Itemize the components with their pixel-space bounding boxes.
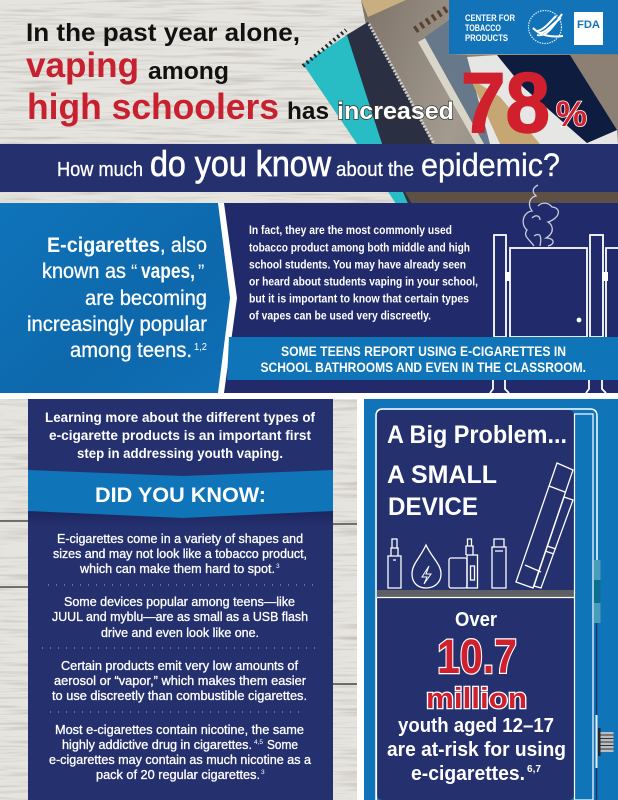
text block: most commonly used: but it is important to know that certain types bbox=[249, 294, 469, 306]
fact: popular devices: JUUL and myblu—are as small as a USB flash bbox=[52, 610, 308, 624]
fact: nicotine: 4,5 bbox=[254, 739, 263, 746]
panel: e-cigarettes intro: increasingly popular bbox=[27, 313, 207, 336]
callout: some teens report: SOME TEENS REPORT USING E-CIGARETTES IN bbox=[281, 344, 566, 359]
banner: how much do you know: do you know bbox=[150, 143, 332, 184]
fact: shapes and sizes: E-cigarettes come in a variety of shapes and bbox=[57, 532, 303, 546]
title: has bbox=[287, 98, 329, 125]
banner: how much do you know: How much bbox=[57, 159, 143, 181]
title: 78 bbox=[461, 56, 550, 151]
logo: Center for Tobacco Products and FDA: PRODUCTS bbox=[465, 33, 508, 44]
stat: 10.7 million youth: youth aged 12–17 bbox=[398, 714, 554, 737]
ribbon heading: did you know: DID YOU KNOW: bbox=[95, 484, 266, 507]
stat: 10.7 million youth: million bbox=[426, 683, 527, 715]
title: increased bbox=[337, 98, 454, 125]
panel: e-cigarettes intro: 1,2 bbox=[194, 342, 207, 353]
heading: a big problem: A Big Problem... bbox=[387, 421, 567, 449]
fact: shapes and sizes: which can make them hard to spot. bbox=[79, 562, 275, 576]
fact: nicotine: Most e-cigarettes contain nicotine, the same bbox=[55, 723, 304, 737]
stat: 10.7 million youth: 6,7 bbox=[527, 764, 541, 775]
text block: most commonly used: school students. You may have already seen bbox=[249, 260, 466, 272]
stat: 10.7 million youth bbox=[387, 609, 566, 785]
title: high schoolers bbox=[27, 86, 279, 127]
banner: how much do you know bbox=[0, 143, 618, 192]
panel: e-cigarettes intro: vapes, bbox=[141, 260, 195, 283]
title: % bbox=[556, 95, 587, 134]
text block: most commonly used: of vapes can be used very discreetly. bbox=[249, 310, 431, 322]
background: lower wood panel bbox=[0, 393, 618, 800]
banner: how much do you know: epidemic? bbox=[421, 147, 560, 183]
background: wood and school supplies photo bbox=[0, 0, 618, 204]
text block: most commonly used bbox=[249, 225, 478, 322]
fact: nicotine: highly addictive drug in cigarettes. bbox=[62, 738, 252, 752]
panel: e-cigarettes intro: known as bbox=[42, 260, 126, 283]
heading: a big problem bbox=[387, 421, 567, 521]
logo: Center for Tobacco Products and FDA: TOBACCO bbox=[465, 23, 501, 34]
panel: e-cigarettes intro: ” bbox=[198, 262, 204, 283]
text block: most commonly used: In fact, they are the most commonly used bbox=[249, 225, 452, 237]
icons: vape devices on shelf bbox=[388, 463, 573, 588]
fact: shapes and sizes: 3 bbox=[276, 563, 280, 570]
heading: a big problem: A SMALL bbox=[387, 461, 497, 489]
stat: 10.7 million youth: e-cigarettes. bbox=[411, 762, 525, 785]
stat: 10.7 million youth: Over bbox=[455, 609, 497, 631]
fact: low aerosol: Certain products emit very low amounts of bbox=[61, 659, 299, 673]
fact: nicotine: 3 bbox=[261, 769, 265, 776]
fact: nicotine: e-cigarettes may contain as much nicotine as a bbox=[49, 753, 311, 767]
fact: shapes and sizes: sizes and may not look like a tobacco product, bbox=[53, 547, 307, 561]
text block: learning more: Learning more about the different types of bbox=[45, 409, 315, 425]
logo: Center for Tobacco Products and FDA bbox=[449, 0, 618, 54]
panel: navy section with bathroom stall bbox=[215, 185, 618, 393]
text block: learning more: e-cigarette products is an important first bbox=[49, 427, 311, 443]
ribbon heading: did you know bbox=[28, 470, 333, 518]
fact: low aerosol: to use discreetly than combustible cigarettes. bbox=[52, 689, 307, 703]
phone buttons bbox=[594, 560, 614, 756]
stat: 10.7 million youth: 10.7 bbox=[437, 631, 517, 684]
fact: low aerosol bbox=[52, 659, 307, 703]
callout: some teens report bbox=[227, 337, 618, 380]
title: among bbox=[148, 58, 229, 85]
heading: a big problem: DEVICE bbox=[388, 493, 478, 521]
fact: popular devices: Some devices popular among teens—like bbox=[64, 595, 295, 609]
text block: learning more bbox=[45, 409, 315, 461]
panel: e-cigarettes intro: E-cigarettes bbox=[47, 234, 160, 257]
logo: Center for Tobacco Products and FDA: CENTER FOR bbox=[465, 13, 515, 24]
panel: e-cigarettes intro: are becoming bbox=[85, 287, 207, 310]
panel: a big problem phone bbox=[364, 399, 618, 800]
fact: low aerosol: aerosol or “vapor,” which makes them easier bbox=[54, 674, 306, 688]
title: vaping bbox=[26, 46, 139, 85]
fact: popular devices bbox=[52, 595, 308, 640]
text block: learning more: step in addressing youth vaping. bbox=[77, 445, 283, 461]
stat: 10.7 million youth: are at-risk for using bbox=[387, 738, 566, 761]
panel: e-cigarettes intro bbox=[0, 203, 237, 393]
icon: HHS eagle seal bbox=[528, 10, 563, 44]
fact: shapes and sizes bbox=[53, 532, 307, 576]
icon: vapor cloud bbox=[523, 185, 558, 246]
fact: nicotine bbox=[49, 723, 311, 782]
panel: e-cigarettes intro: , also bbox=[160, 234, 207, 257]
fact: nicotine: Some bbox=[267, 738, 298, 752]
icon: bathroom stall door bbox=[490, 235, 618, 393]
panel: e-cigarettes intro: among teens. bbox=[70, 339, 192, 362]
fact: popular devices: drive and even look like one. bbox=[101, 626, 259, 640]
panel: did you know bbox=[28, 399, 333, 800]
title: In the past year alone, bbox=[26, 19, 300, 47]
text block: most commonly used: or heard about students vaping in your school, bbox=[249, 276, 478, 288]
callout: some teens report: SCHOOL BATHROOMS AND EVEN IN THE CLASSROOM. bbox=[260, 360, 586, 375]
fact: nicotine: pack of 20 regular cigarettes. bbox=[96, 768, 260, 782]
title bbox=[26, 19, 587, 151]
banner: how much do you know: about the bbox=[336, 159, 414, 181]
text block: most commonly used: tobacco product among both middle and high bbox=[249, 242, 470, 254]
panel: e-cigarettes intro: “ bbox=[131, 262, 137, 283]
logo: Center for Tobacco Products and FDA: FDA bbox=[577, 19, 600, 31]
